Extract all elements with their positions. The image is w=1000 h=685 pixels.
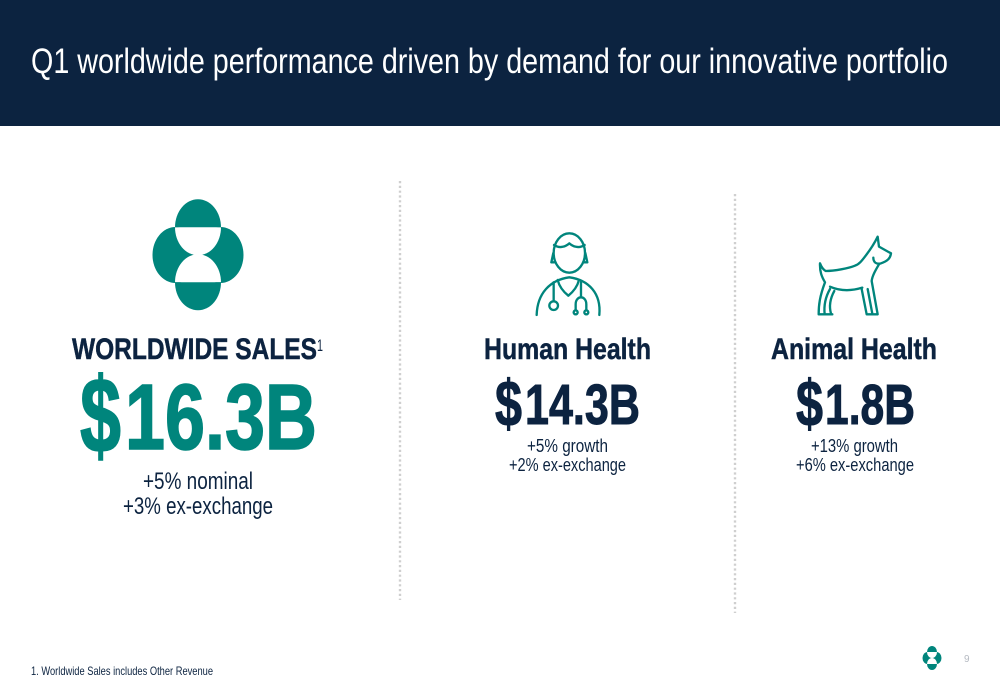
value: human health sales: 14.3B	[525, 373, 640, 437]
text: ex-exchange growth: +3% ex-exchange	[123, 493, 273, 520]
value: animal health sales: $	[796, 366, 823, 440]
icon: small logo	[922, 646, 942, 670]
panel: human health	[484, 233, 651, 475]
value: animal health sales: 1.8B	[825, 373, 915, 437]
heading: human health: Human Health	[484, 333, 651, 366]
text: human health ex-exchange: +2% ex-exchange	[509, 455, 626, 475]
divider: right	[734, 194, 736, 613]
text: animal health growth: +13% growth	[811, 436, 898, 456]
value: total sales: $	[80, 355, 121, 475]
panel: animal health	[771, 237, 937, 475]
footnote: 1. Worldwide Sales includes Other Revenue	[31, 664, 213, 678]
text: animal health ex-exchange: +6% ex-exchange	[796, 455, 914, 475]
icon: dog	[819, 237, 891, 314]
text: nominal growth: +5% nominal	[143, 468, 253, 495]
icon: doctor	[537, 233, 600, 315]
heading: worldwide sales: WORLDWIDE SALES	[72, 333, 317, 366]
value: total sales: 16.3B	[125, 365, 317, 469]
panel: worldwide sales	[72, 199, 323, 520]
header band	[0, 0, 1000, 126]
value: human health sales: $	[495, 366, 522, 440]
page number: 9	[964, 654, 970, 665]
divider: left	[399, 181, 401, 600]
icon: company logo	[152, 199, 244, 310]
heading: animal health: Animal Health	[771, 333, 937, 366]
footnote marker: 1	[317, 336, 323, 355]
text: human health growth: +5% growth	[527, 436, 608, 456]
